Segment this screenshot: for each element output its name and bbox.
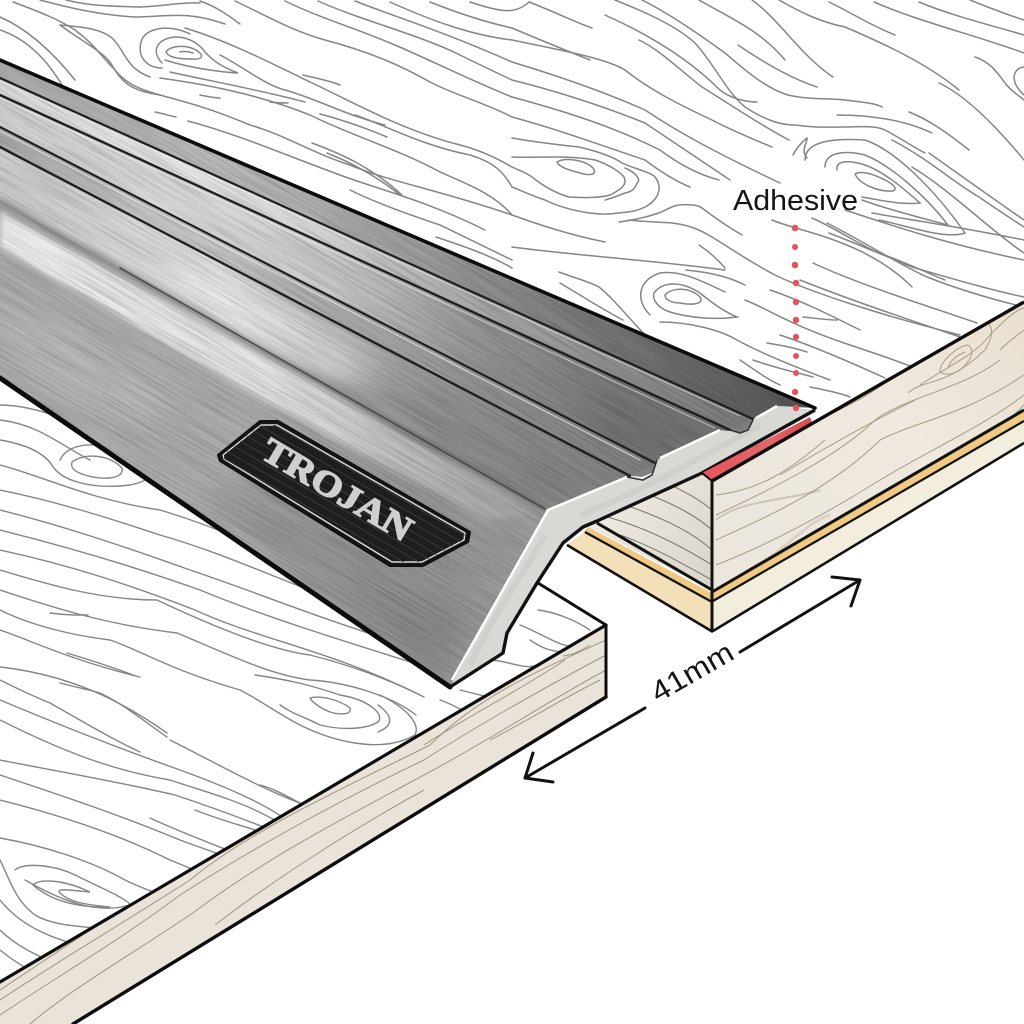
metal trim bbox=[0, 58, 817, 690]
trim: cut end profile bbox=[450, 406, 815, 687]
wood grain: lower board top surface bbox=[0, 405, 590, 970]
wood grain: upper board top surface bbox=[0, 0, 1024, 397]
trim: brushed steel top bands bbox=[0, 60, 815, 687]
trim: sheen and shading bbox=[0, 62, 804, 678]
brand badge: TROJAN bbox=[217, 420, 471, 567]
right board: front face bbox=[712, 302, 1024, 632]
dimension arrow: upper bbox=[740, 577, 860, 652]
dimension arrow: lower bbox=[525, 708, 645, 782]
red adhesive strip bbox=[702, 302, 1024, 482]
right board: end grain and underlay bbox=[567, 473, 713, 632]
knot: upper right bbox=[793, 138, 965, 235]
trim: rib and fold lines bbox=[0, 78, 753, 509]
knot: centre right bbox=[641, 270, 745, 318]
knot: upper left bbox=[140, 28, 238, 73]
adhesive label: Adhesive bbox=[733, 185, 858, 217]
left board: front face bbox=[0, 625, 606, 1024]
grain: upper right flow lines bbox=[512, 0, 1024, 253]
left board top edges bbox=[0, 583, 606, 1024]
dimension label: 41mm bbox=[646, 636, 739, 709]
adhesive leader dots bbox=[792, 225, 799, 411]
trim: outline edges bbox=[0, 60, 815, 687]
badge text: TROJAN bbox=[255, 430, 419, 549]
